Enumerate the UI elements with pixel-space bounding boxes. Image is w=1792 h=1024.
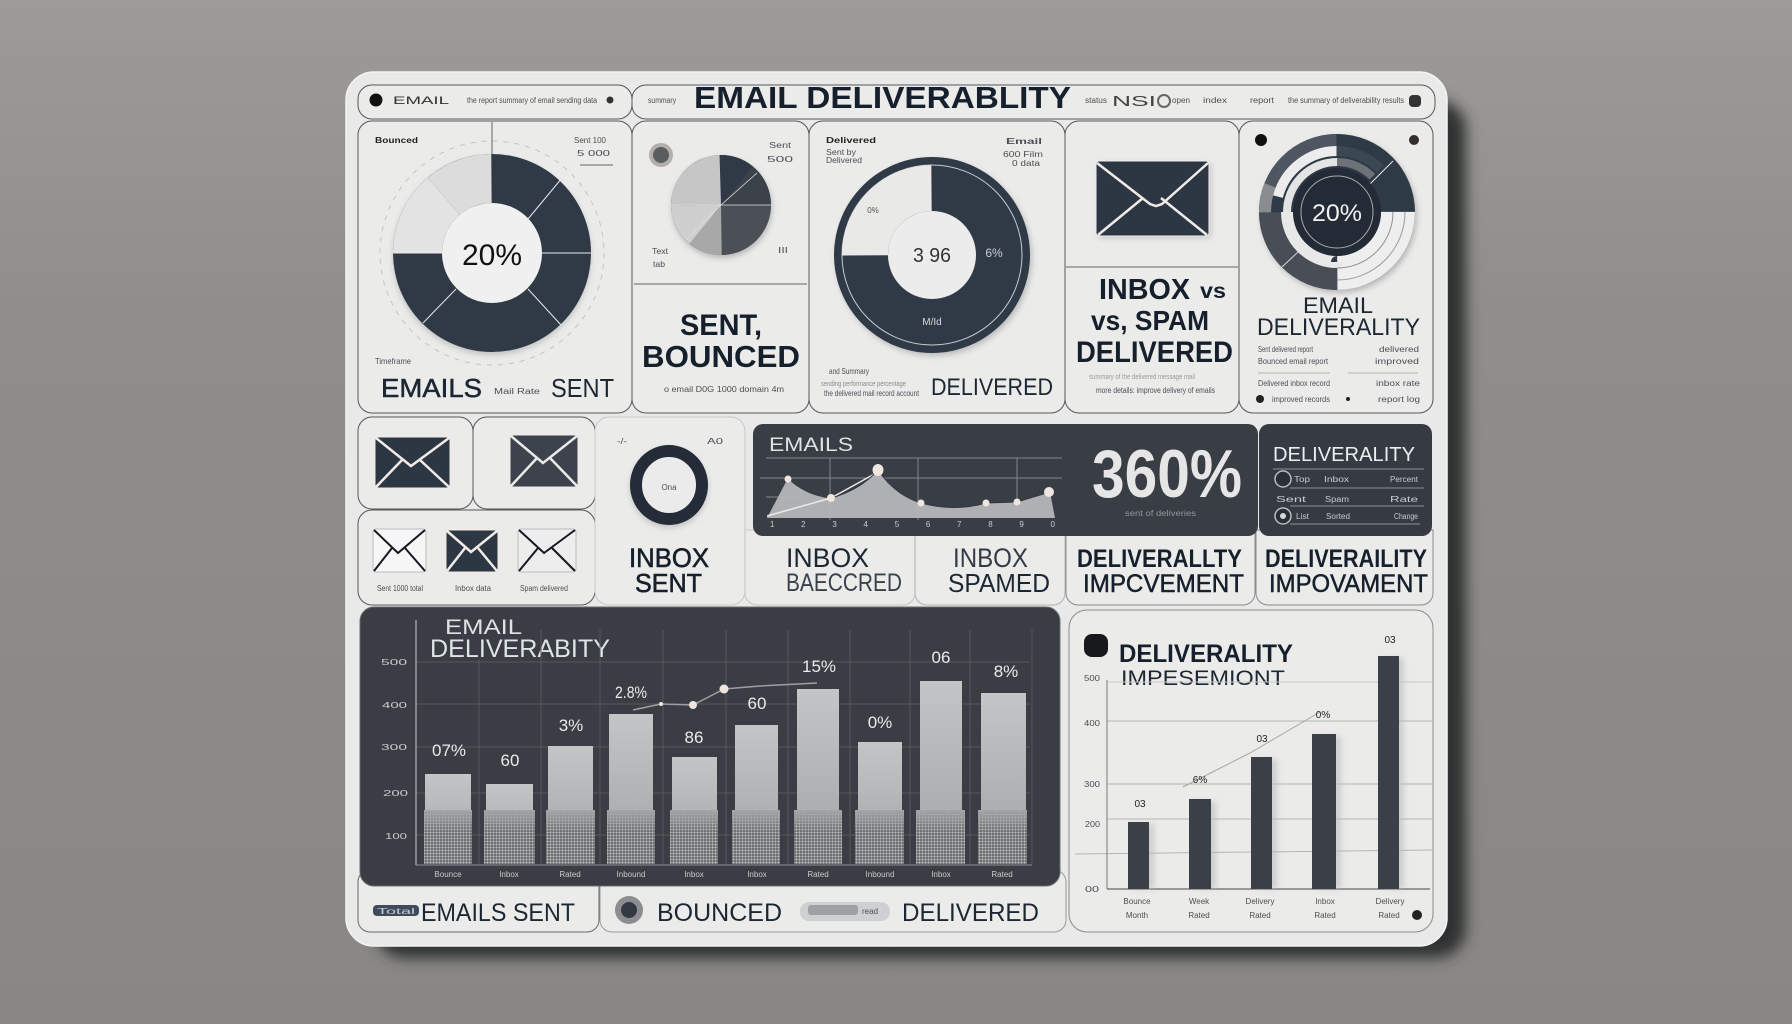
grid and axes: 100 [385,832,408,841]
label: sent: SENT [551,373,614,403]
bar values: 03 [1384,635,1396,646]
icon: envelope [1096,161,1211,238]
label: sent, bounced: SENT, [680,309,762,342]
panel: inbox sent ring [595,417,745,605]
legend list: Sent delivered report [1258,345,1314,354]
legend: bounced and delivered: read [862,907,878,916]
table rows: Rate [1390,495,1419,504]
legend list: Delivered inbox record [1258,379,1330,388]
bar values: 8% [994,662,1018,681]
bar values: 03 [1256,734,1268,745]
panel: sent bounced pie: o email D0G 1000 domain 4m [664,385,784,394]
icon: envelope dark small [446,530,498,572]
bar values: 06 [932,648,950,667]
grid and axis: 200 [1085,820,1101,829]
x axis labels: Month [1126,911,1148,920]
donut chart: delivered [834,157,1032,356]
label: emails: EMAILS [381,373,482,403]
legend: emails sent: EMAILS SENT [421,899,575,927]
icon: envelope white outlined [518,529,576,572]
donut chart: 20%: 20% [462,239,522,272]
panel: emails area chart and 360% [753,424,1258,536]
bar values: 60 [748,694,766,713]
x axis labels: Week [1189,897,1210,906]
heading: EMAIL [445,616,522,639]
panel: sent bounced pie [632,121,809,413]
panel: delivered donut: Sent by [826,148,856,157]
panel: delivered donut: 0 data [1012,159,1041,168]
panel: sent bounced pie: Text [652,247,669,256]
panel: inbox vs spam [1065,121,1239,413]
label: sent, bounced: BOUNCED [642,339,800,374]
heading [430,616,610,663]
label: email deliverality: EMAIL [1303,293,1373,318]
label: deliverality improvament: DELIVERAILITY [1265,545,1427,573]
x axis labels: Inbox [684,870,704,879]
x axis labels: Rated [991,870,1013,879]
x axis labels: Inbox [931,870,951,879]
header bar [358,80,1435,119]
table rows: Inbox [1324,475,1349,484]
ring icon [636,451,702,522]
icon: envelope white [373,529,426,572]
label: inbox spamed [948,543,1050,598]
heading [1119,640,1293,690]
header bar: summary [648,96,676,105]
panel: sent bounced pie: 500 [767,155,794,164]
bar values [1134,635,1396,810]
donut chart: delivered: 0% [867,206,879,215]
header bar: NSI [1112,93,1156,110]
panel: deliverality impesemiont bar chart [1069,610,1433,932]
x axis labels: Delivery [1376,897,1404,906]
panel: delivered donut: 600 Film [1003,150,1043,159]
panel: emails sent donut: 5 000 [577,149,611,158]
panel: email deliverality gauge [1239,121,1433,413]
bar values: 07% [432,741,466,760]
panel: sent bounced pie: Sent [769,141,792,150]
legend: emails sent: Total [377,907,415,916]
panel: envelope icons: Inbox data [455,584,492,593]
panel: inbox vs spam: more details: improve delivery of emails [1096,386,1215,395]
grid and axis: 300 [1084,780,1101,789]
trend line [633,683,817,710]
legend list: delivered [1379,345,1419,354]
legend list: improved records [1272,395,1330,404]
panel: delivered donut: sending performance percentage [821,379,906,388]
x axis labels: Rated [1314,911,1336,920]
legend: bounced and delivered: BOUNCED [657,899,782,927]
pie chart [671,155,772,258]
x axis labels: Rated [1188,911,1210,920]
ring icon: Ona [661,483,677,492]
label: inbox sent [629,543,709,598]
icon: envelope dark large [375,437,450,488]
heading: DELIVERALITY [1273,444,1415,466]
grid and axes: 200 [383,789,409,798]
donut chart: 20% [393,154,591,355]
panel: deliverality dark table [1259,424,1432,536]
x axis labels: Bounce [1123,897,1151,906]
label: inbox spamed: SPAMED [948,568,1050,598]
label: delivered: DELIVERED [931,374,1053,401]
panel: delivered donut: and Summary [829,367,869,376]
bar values [432,648,1018,770]
label: deliverallty improvement: IMPCVEMENT [1083,570,1244,598]
panel: emails sent donut: Sent 100 [574,136,607,145]
header bar: the summary of deliverability results [1288,96,1404,105]
panel: emails sent donut [358,121,632,413]
trend line [1183,712,1320,787]
grid and axis [1075,674,1432,894]
area chart [760,458,1062,529]
x axis labels: Inbound [866,870,894,879]
bars [1128,656,1404,889]
bar values: 86 [685,728,703,747]
grid and axes: 300 [381,743,408,752]
panel: inbox sent ring: A0 [707,437,724,446]
header bar: open [1172,96,1190,105]
table rows: Percent [1390,475,1419,484]
x axis labels [434,870,1013,879]
panel: emails sent donut: Mail Rate [494,387,541,396]
heading: DELIVERALITY [1119,640,1293,668]
heading: DELIVERABITY [430,635,610,663]
bars [424,681,1027,864]
donut chart: delivered: M/Id [922,317,942,328]
legend: bounced and delivered [600,870,1066,932]
x axis labels: Rated [1249,911,1271,920]
icon: envelope gray [510,435,578,487]
panel: delivered donut: the delivered mail record account [824,389,920,398]
bar values: 15% [802,657,836,676]
table rows: Change [1394,512,1418,521]
legend list [1256,345,1421,404]
table rows: Sent [1276,495,1307,504]
header bar: status [1085,96,1107,105]
bar values: 60 [501,751,519,770]
legend: bounced and delivered: DELIVERED [902,899,1039,927]
legend list: Bounced email report [1258,357,1329,366]
bar values: 6% [1193,775,1207,786]
label: inbox spamed: INBOX [953,543,1028,573]
label: inbox baecred [786,543,902,597]
panel: inbox vs spam: summary of the delivered message mail [1089,374,1195,381]
header bar: index [1203,96,1227,105]
x axis labels: Inbox [1315,897,1335,906]
panel: emails sent donut: Bounced [375,135,418,145]
label: sent, bounced [642,309,800,374]
panel: emails area chart and 360%: sent of deliveries [1125,509,1196,518]
x axis labels: Rated [1378,911,1400,920]
x axis labels: Rated [559,870,581,879]
label: deliverality improvament [1265,545,1428,598]
label: deliverallty improvement [1077,545,1244,598]
panel: sent bounced pie: tab [653,260,666,269]
x axis labels: Bounce [434,870,462,879]
area chart: 1 2 3 4 5 6 7 8 9 0 [770,520,1056,529]
grid and axis: 400 [1084,719,1101,728]
label: inbox vs spam delivered: INBOX [1099,274,1191,306]
bar values: 03 [1134,799,1146,810]
table rows: List [1296,512,1310,521]
panel: envelope icons: Sent 1000 total [377,584,423,593]
panel: delivered donut: Delivered [826,156,862,165]
heading: IMPESEMIONT [1121,667,1285,690]
panel: label cells row [745,530,1433,605]
header bar: the report summary of email sending data [467,96,597,105]
panel: envelope icons: Spam delivered [520,584,568,593]
panel: inbox sent ring: -/- [617,437,627,446]
big number: 360%: 360% [1092,436,1242,512]
label: inbox baecred: INBOX [786,543,869,573]
icon: badge [1084,634,1108,657]
label: email deliverality [1257,293,1420,341]
x axis labels: Inbox [499,870,519,879]
table rows: Sorted [1326,512,1350,521]
header bar: report [1250,96,1275,105]
panel: email deliverability bar chart [360,607,1060,886]
label: deliverallty improvement: DELIVERALLTY [1077,545,1242,573]
panel: sent bounced pie: III [778,246,788,255]
x axis labels [1123,897,1404,920]
gauge: 20% [1259,134,1417,293]
label: deliverality improvament: IMPOVAMENT [1269,570,1428,598]
x axis labels: Inbound [617,870,645,879]
table rows: Top [1294,475,1311,484]
grid and axes [381,620,1032,865]
label: inbox vs spam delivered [1076,274,1233,369]
legend list: inbox rate [1376,379,1421,388]
grid and axis: 00 [1085,885,1100,894]
bar values: 0% [1316,710,1330,721]
bar values: 0% [868,713,892,732]
bar values: 3% [559,716,583,735]
gauge: 20%: 20% [1312,200,1362,227]
grid and axes: 400 [382,701,408,710]
table rows: Spam [1325,495,1349,504]
title: EMAIL DELIVERABLITY [694,80,1071,115]
grid and axes: 500 [381,658,408,667]
x axis labels: Inbox [747,870,767,879]
panel: delivered donut: Email [1006,137,1042,146]
table rows [1273,469,1424,524]
x axis labels: Delivery [1246,897,1274,906]
panel: delivered donut: Delivered [826,135,876,145]
bar values: 2.8% [615,683,647,702]
x axis labels: Rated [807,870,829,879]
label: email deliverality: DELIVERALITY [1257,314,1420,341]
grid and axis: 500 [1084,674,1101,683]
heading: emails: EMAILS [769,435,853,456]
legend list: improved [1375,357,1419,366]
donut chart: delivered: 6% [985,246,1003,260]
panel: envelope icons [358,417,595,605]
label: inbox sent: SENT [635,568,702,598]
donut chart: delivered: 3 96 [913,245,951,267]
label: inbox vs spam delivered: DELIVERED [1076,336,1233,369]
panel: emails sent donut: Timeframe [375,357,412,366]
header bar: EMAIL [393,95,449,107]
legend: emails sent [358,870,599,932]
label: inbox vs spam delivered: vs [1200,280,1226,303]
label: inbox baecred: BAECCRED [786,569,902,597]
legend list: report log [1378,395,1420,404]
dashboard board [346,72,1447,946]
label: inbox vs spam delivered: vs, SPAM [1091,305,1209,336]
panel: delivered donut [809,121,1065,413]
label: inbox sent: INBOX [629,543,709,573]
